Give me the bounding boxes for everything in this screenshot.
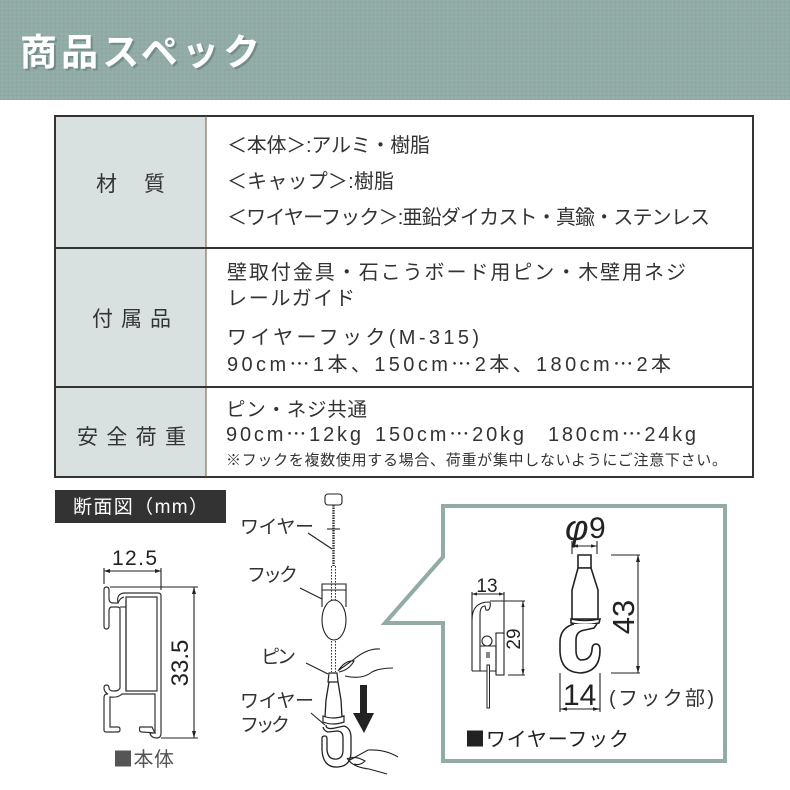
arrow: pull down bbox=[353, 685, 374, 733]
title: 商品スペック bbox=[22, 34, 262, 75]
row: safe load: ピン・ネジ共通 bbox=[226, 399, 367, 421]
header banner bbox=[0, 0, 790, 100]
row: safe load bbox=[77, 399, 727, 469]
dimension: 14: 14 bbox=[563, 679, 596, 712]
row: material: 質 bbox=[144, 173, 165, 196]
row: safe load: 150cm…20kg bbox=[375, 418, 524, 447]
assembly illustration bbox=[240, 494, 398, 774]
section label: cross section: 断面図（mm） bbox=[73, 496, 208, 518]
caption: body: ■本体 bbox=[113, 743, 174, 772]
row: accessories: レールガイド bbox=[227, 287, 355, 310]
hook cover bbox=[322, 584, 346, 640]
dimension: phi 9: φ bbox=[565, 507, 588, 548]
label: wire: ワイヤー bbox=[240, 517, 314, 538]
row: safe load: 90cm…12kg bbox=[226, 418, 361, 447]
wire hook with fingers bbox=[322, 649, 398, 774]
wire bbox=[325, 494, 342, 672]
label: wire bbox=[240, 517, 332, 549]
label: hook bbox=[247, 564, 322, 599]
row: accessories: 付属品 bbox=[92, 308, 171, 331]
row: accessories bbox=[92, 261, 686, 377]
title: 商品スペック bbox=[20, 32, 260, 73]
cross-section drawing bbox=[104, 547, 198, 772]
row: safe load: 安全荷重 bbox=[77, 426, 186, 449]
label: pin: ピン bbox=[261, 647, 296, 668]
row: safe load: ※フックを複数使用する場合、荷重が集中しないようにご注意下さい。 bbox=[226, 452, 727, 469]
label: pin bbox=[261, 647, 328, 674]
row: safe load: 180cm…24kg bbox=[548, 418, 696, 447]
spec table bbox=[55, 116, 753, 477]
row: accessories: ワイヤーフック(M-315) bbox=[227, 326, 479, 349]
hook front view bbox=[560, 555, 600, 673]
dimension: 29: 29 bbox=[504, 628, 525, 650]
row: material bbox=[96, 134, 710, 229]
dimension: phi 9: 9 bbox=[589, 512, 606, 545]
label: wire hook: フック bbox=[240, 714, 290, 736]
label: hook: フック bbox=[247, 564, 298, 586]
row: material: 材 bbox=[96, 173, 117, 196]
dimension: phi 9 bbox=[565, 507, 606, 554]
label: wire hook: ワイヤー bbox=[240, 691, 314, 712]
rail profile bbox=[104, 587, 161, 738]
row: material: ＜本体＞:アルミ・樹脂 bbox=[227, 134, 430, 157]
section label: cross section bbox=[55, 490, 226, 523]
callout panel: wire hook dimensions bbox=[385, 506, 725, 761]
dimension: 13: 13 bbox=[476, 576, 498, 597]
dimension: 43: 43 bbox=[606, 600, 641, 634]
caption: wire hook: ■ワイヤーフック bbox=[465, 723, 629, 752]
dimension: width 12.5: 12.5 bbox=[112, 547, 157, 570]
side view drawing bbox=[472, 602, 504, 708]
dimension: height 33.5: 33.5 bbox=[167, 640, 194, 686]
label: wire hook bbox=[240, 691, 325, 736]
row: material: ＜キャップ＞:樹脂 bbox=[227, 170, 394, 193]
row: accessories: 壁取付金具・石こうボード用ピン・木壁用ネジ bbox=[227, 261, 686, 284]
dimension: width 12.5 bbox=[104, 547, 161, 590]
note: hook part: (フック部) bbox=[609, 687, 714, 710]
dimension: 29 bbox=[490, 601, 525, 675]
row: material: ＜ワイヤーフック＞:亜鉛ダイカスト・真鍮・ステンレス bbox=[227, 206, 710, 229]
dimension: height 33.5 bbox=[110, 587, 198, 738]
row: accessories: 90cm…1本、150cm…2本、180cm…2本 bbox=[227, 348, 671, 377]
dimension: 43 bbox=[606, 555, 641, 673]
dimension: 13 bbox=[472, 576, 504, 633]
